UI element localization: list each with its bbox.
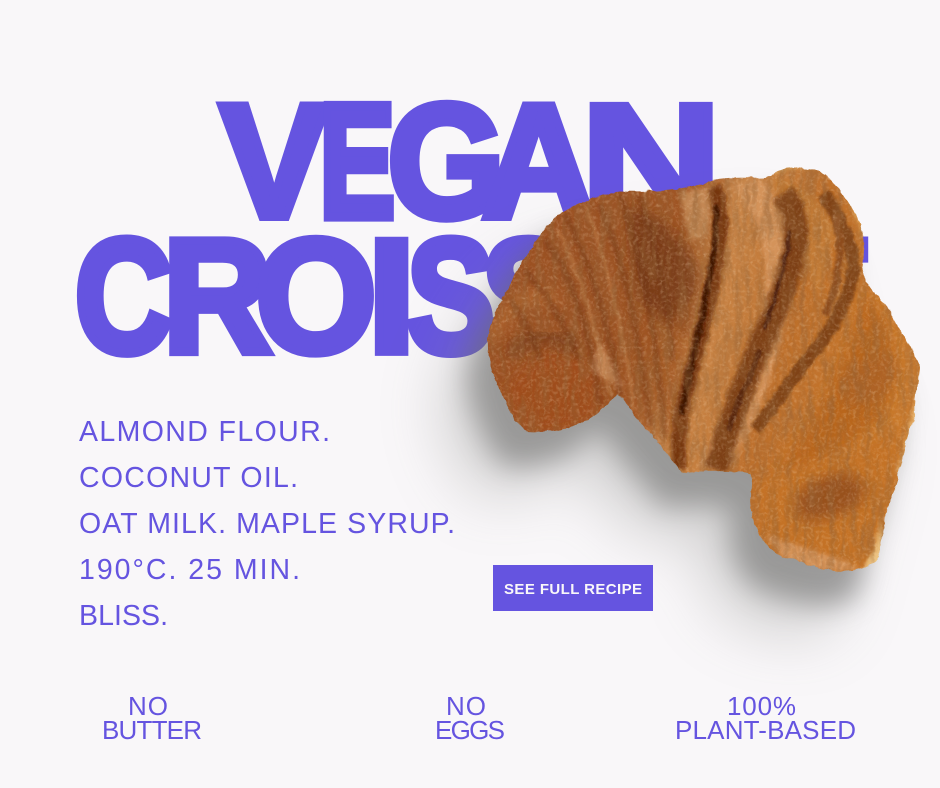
ingredient line: 190°C. 25 MIN. (79, 554, 300, 586)
title line: CROISSANT: I (367, 205, 416, 387)
title line: CROISSANT (75, 205, 866, 387)
badge: no eggs: NO (446, 691, 486, 721)
fine texture (480, 160, 930, 580)
title line: VEGAN: A (482, 71, 595, 252)
badge: no butter: BUTTER (102, 715, 202, 745)
ingredient line: BLISS. (79, 600, 168, 632)
ingredient line: ALMOND FLOUR. (79, 416, 330, 448)
dark crease 1 (678, 187, 721, 470)
dark crease 2 (716, 193, 796, 470)
title line: CROISSANT: R (163, 206, 272, 387)
ridges on left body (510, 195, 672, 440)
dark upper middle patch (629, 205, 700, 340)
button: see full recipe (493, 565, 653, 611)
title line: VEGAN (220, 70, 721, 252)
title line: CROISSANT: S (482, 205, 574, 386)
badge: 100% plant-based: 100% (727, 691, 796, 721)
badge: no eggs: EGGS (435, 715, 505, 745)
badge: no butter: NO (128, 691, 168, 721)
title (75, 70, 866, 387)
pale flaky edge (774, 167, 864, 238)
orange shoulder near top (776, 181, 833, 290)
badge: no butter (102, 691, 202, 745)
title line: VEGAN: V (220, 71, 328, 252)
title line: CROISSANT: C (75, 205, 172, 387)
pale highlight on central roll (698, 178, 792, 468)
title line: VEGAN: N (581, 70, 721, 251)
lower right pale patch (765, 535, 860, 572)
title line: CROISSANT: T (767, 206, 866, 387)
right segment (787, 302, 896, 465)
ingredient line: OAT MILK. MAPLE SYRUP. (79, 508, 455, 540)
button: see full recipe: SEE FULL RECIPE (504, 581, 642, 598)
title line: CROISSANT: N (680, 206, 797, 387)
title line: CROISSANT: A (570, 206, 687, 387)
left lobe shading (505, 353, 610, 433)
badge: 100% plant-based: PLANT-BASED (675, 715, 856, 745)
ingredient line: COCONUT OIL. (79, 462, 298, 494)
infographic canvas (76, 100, 920, 740)
ingredient list (79, 416, 455, 632)
dark crease 3 (755, 193, 853, 430)
title line: CROISSANT: O (256, 205, 377, 387)
badge: no eggs (435, 691, 505, 745)
title line: VEGAN: G (388, 71, 505, 252)
title line: CROISSANT: S (407, 207, 495, 387)
badge: 100% plant-based (675, 691, 856, 745)
icon: croissant (480, 160, 935, 580)
croissant shadow (443, 201, 900, 633)
title line: VEGAN: E (319, 70, 395, 252)
